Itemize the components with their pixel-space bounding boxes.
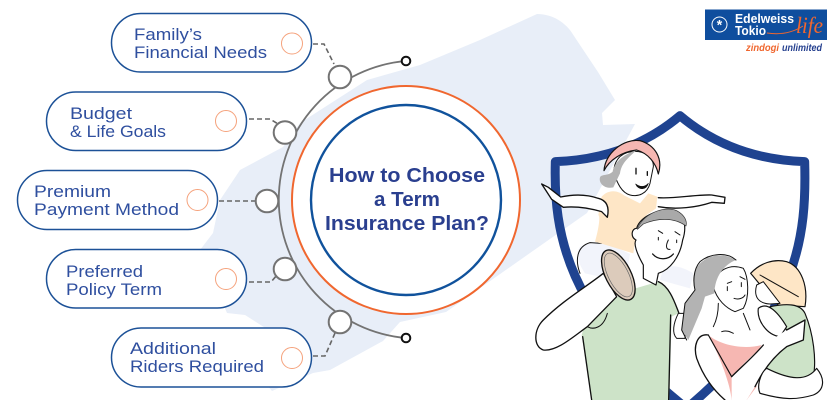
logo: * bbox=[717, 16, 723, 32]
title bbox=[325, 165, 489, 235]
connector arc bbox=[279, 61, 406, 338]
child bbox=[542, 140, 725, 288]
pill: Premium Payment Method: Premium bbox=[34, 183, 111, 201]
logo: zindogi bbox=[745, 42, 780, 54]
pill: Preferred Policy Term: Policy Term bbox=[66, 281, 162, 299]
man bbox=[536, 209, 687, 400]
arc end dot: top bbox=[402, 57, 410, 65]
pill: Budget & Life Goals: Budget bbox=[70, 105, 132, 123]
arc end dot: bottom bbox=[402, 334, 410, 342]
pill: Preferred Policy Term: Preferred bbox=[66, 263, 143, 281]
pill: Family's Financial Needs bbox=[112, 14, 312, 72]
title: Insurance Plan? bbox=[325, 213, 489, 235]
central circle bbox=[292, 86, 520, 314]
timeline nodes bbox=[256, 66, 351, 333]
pill: Family's Financial Needs: Family’s bbox=[134, 26, 202, 44]
dashed connectors bbox=[219, 44, 335, 356]
pill: Additional Riders Required: Riders Required bbox=[130, 358, 264, 376]
title: How to Choose bbox=[329, 165, 485, 187]
pill: Premium Payment Method: Payment Method bbox=[34, 201, 179, 219]
pill: Additional Riders Required: Additional bbox=[130, 340, 216, 358]
logo bbox=[705, 10, 827, 54]
pill: Family's Financial Needs: Financial Needs bbox=[134, 44, 267, 62]
background brush stroke bbox=[200, 14, 635, 391]
pill: Premium Payment Method bbox=[18, 170, 218, 230]
logo: Tokio bbox=[735, 24, 766, 38]
logo: life bbox=[796, 13, 823, 38]
pill: Budget & Life Goals: & Life Goals bbox=[70, 123, 166, 141]
title: a Term bbox=[374, 189, 440, 211]
woman and baby bbox=[682, 255, 823, 400]
family illustration with shield bbox=[536, 116, 823, 400]
logo: Edelweiss bbox=[735, 12, 794, 26]
pill: Preferred Policy Term bbox=[46, 250, 246, 308]
pill: Budget & Life Goals bbox=[46, 92, 246, 150]
icon: shield bbox=[555, 116, 805, 400]
logo: unlimited bbox=[782, 42, 822, 54]
pill: Additional Riders Required bbox=[112, 328, 312, 387]
